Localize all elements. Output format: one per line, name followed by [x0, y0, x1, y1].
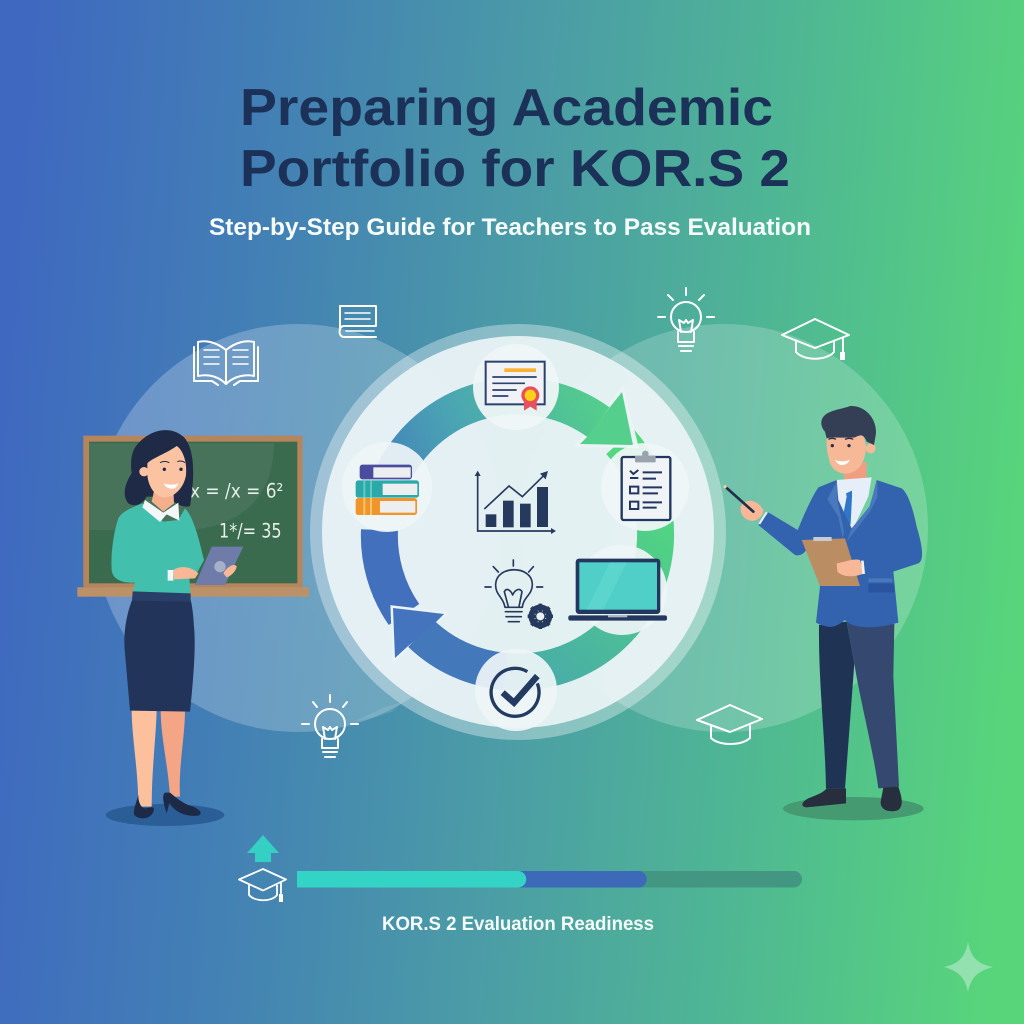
- cuff: [759, 512, 767, 524]
- chalkboard: [77, 436, 309, 597]
- teal fill: [297, 871, 526, 888]
- ring icons in 3x coordinates: [356, 362, 670, 716]
- lapels: [827, 480, 877, 542]
- shadow: [106, 804, 224, 826]
- face: [826, 433, 876, 474]
- cuff: [168, 570, 173, 581]
- teacher man illustration: [723, 406, 924, 820]
- icon: sparkle: [944, 942, 993, 992]
- hair: [821, 406, 876, 445]
- sweater collar: [142, 500, 179, 522]
- cuff: [862, 561, 864, 574]
- paper crease detail: [353, 702, 403, 722]
- halo disc: [310, 324, 726, 740]
- tie: [842, 491, 852, 540]
- shadow: [783, 797, 924, 820]
- neck: [842, 462, 867, 482]
- node circles: [342, 344, 689, 731]
- cover: gap beside lower arrowhead: [393, 608, 444, 658]
- title: [240, 79, 790, 198]
- inner disc: [322, 336, 714, 728]
- icon: open book: [194, 341, 258, 385]
- trousers: [819, 622, 899, 788]
- title: Portfolio for KOR.S 2: [240, 140, 790, 198]
- neck: [152, 487, 174, 512]
- pen: [723, 485, 753, 512]
- arrowhead: top right: [580, 392, 633, 445]
- blue fill: [297, 871, 647, 888]
- arc: lower left segment: [421, 634, 506, 672]
- central cycle diagram: [310, 324, 726, 740]
- icon: certificate: [486, 362, 545, 411]
- title: Preparing Academic: [240, 79, 773, 137]
- hair back: [125, 430, 193, 507]
- icon: up arrow: [247, 835, 279, 862]
- skirt: [124, 598, 195, 712]
- icon: progress graduation cap: [239, 869, 286, 902]
- pointing hand: [741, 501, 763, 521]
- icon: graduation cap lower: [697, 705, 762, 744]
- jacket: [758, 480, 922, 627]
- hands: [173, 565, 237, 579]
- icon: light bulb with gear: [485, 560, 553, 629]
- track: [297, 871, 802, 888]
- face: [139, 446, 186, 497]
- legs: [132, 710, 185, 807]
- arc: top segment: [392, 396, 599, 476]
- sweater: [111, 503, 204, 594]
- cover: gap beside top arrowhead: [580, 392, 635, 445]
- icon: light bulb top: [658, 288, 714, 351]
- icon: laptop: [568, 559, 667, 621]
- arc: right segment: [494, 442, 656, 672]
- shirt: [837, 477, 872, 528]
- icon: check mark: [491, 668, 539, 716]
- teacher illustration with chalkboard: [77, 430, 309, 826]
- icon: graduation cap top right: [782, 319, 849, 360]
- clipboard: [802, 537, 860, 586]
- icon: clipboard checklist: [622, 451, 670, 520]
- hand holding clipboard: [837, 560, 864, 576]
- shoes: [134, 793, 201, 818]
- arc: left segment: [379, 530, 404, 614]
- icon: stack of books: [356, 465, 419, 515]
- progress label: KOR.S 2 Evaluation Readiness: [382, 914, 654, 935]
- icon: small book: [340, 306, 376, 337]
- readiness progress bar: [297, 871, 802, 888]
- waistband: [132, 591, 191, 602]
- shoes: [802, 787, 902, 811]
- icon: light bulb lower left: [302, 695, 358, 757]
- subtitle: Step-by-Step Guide for Teachers to Pass Evaluation: [209, 214, 811, 241]
- chalk equation: x = /x = 6²: [190, 479, 283, 502]
- icon: growth chart: [475, 471, 556, 534]
- tablet: [195, 547, 243, 585]
- background circles: [94, 324, 928, 732]
- pocket: [868, 578, 894, 592]
- chalk equation 2: 1*/= 35: [219, 519, 282, 542]
- arrowhead: lower left: [393, 608, 444, 658]
